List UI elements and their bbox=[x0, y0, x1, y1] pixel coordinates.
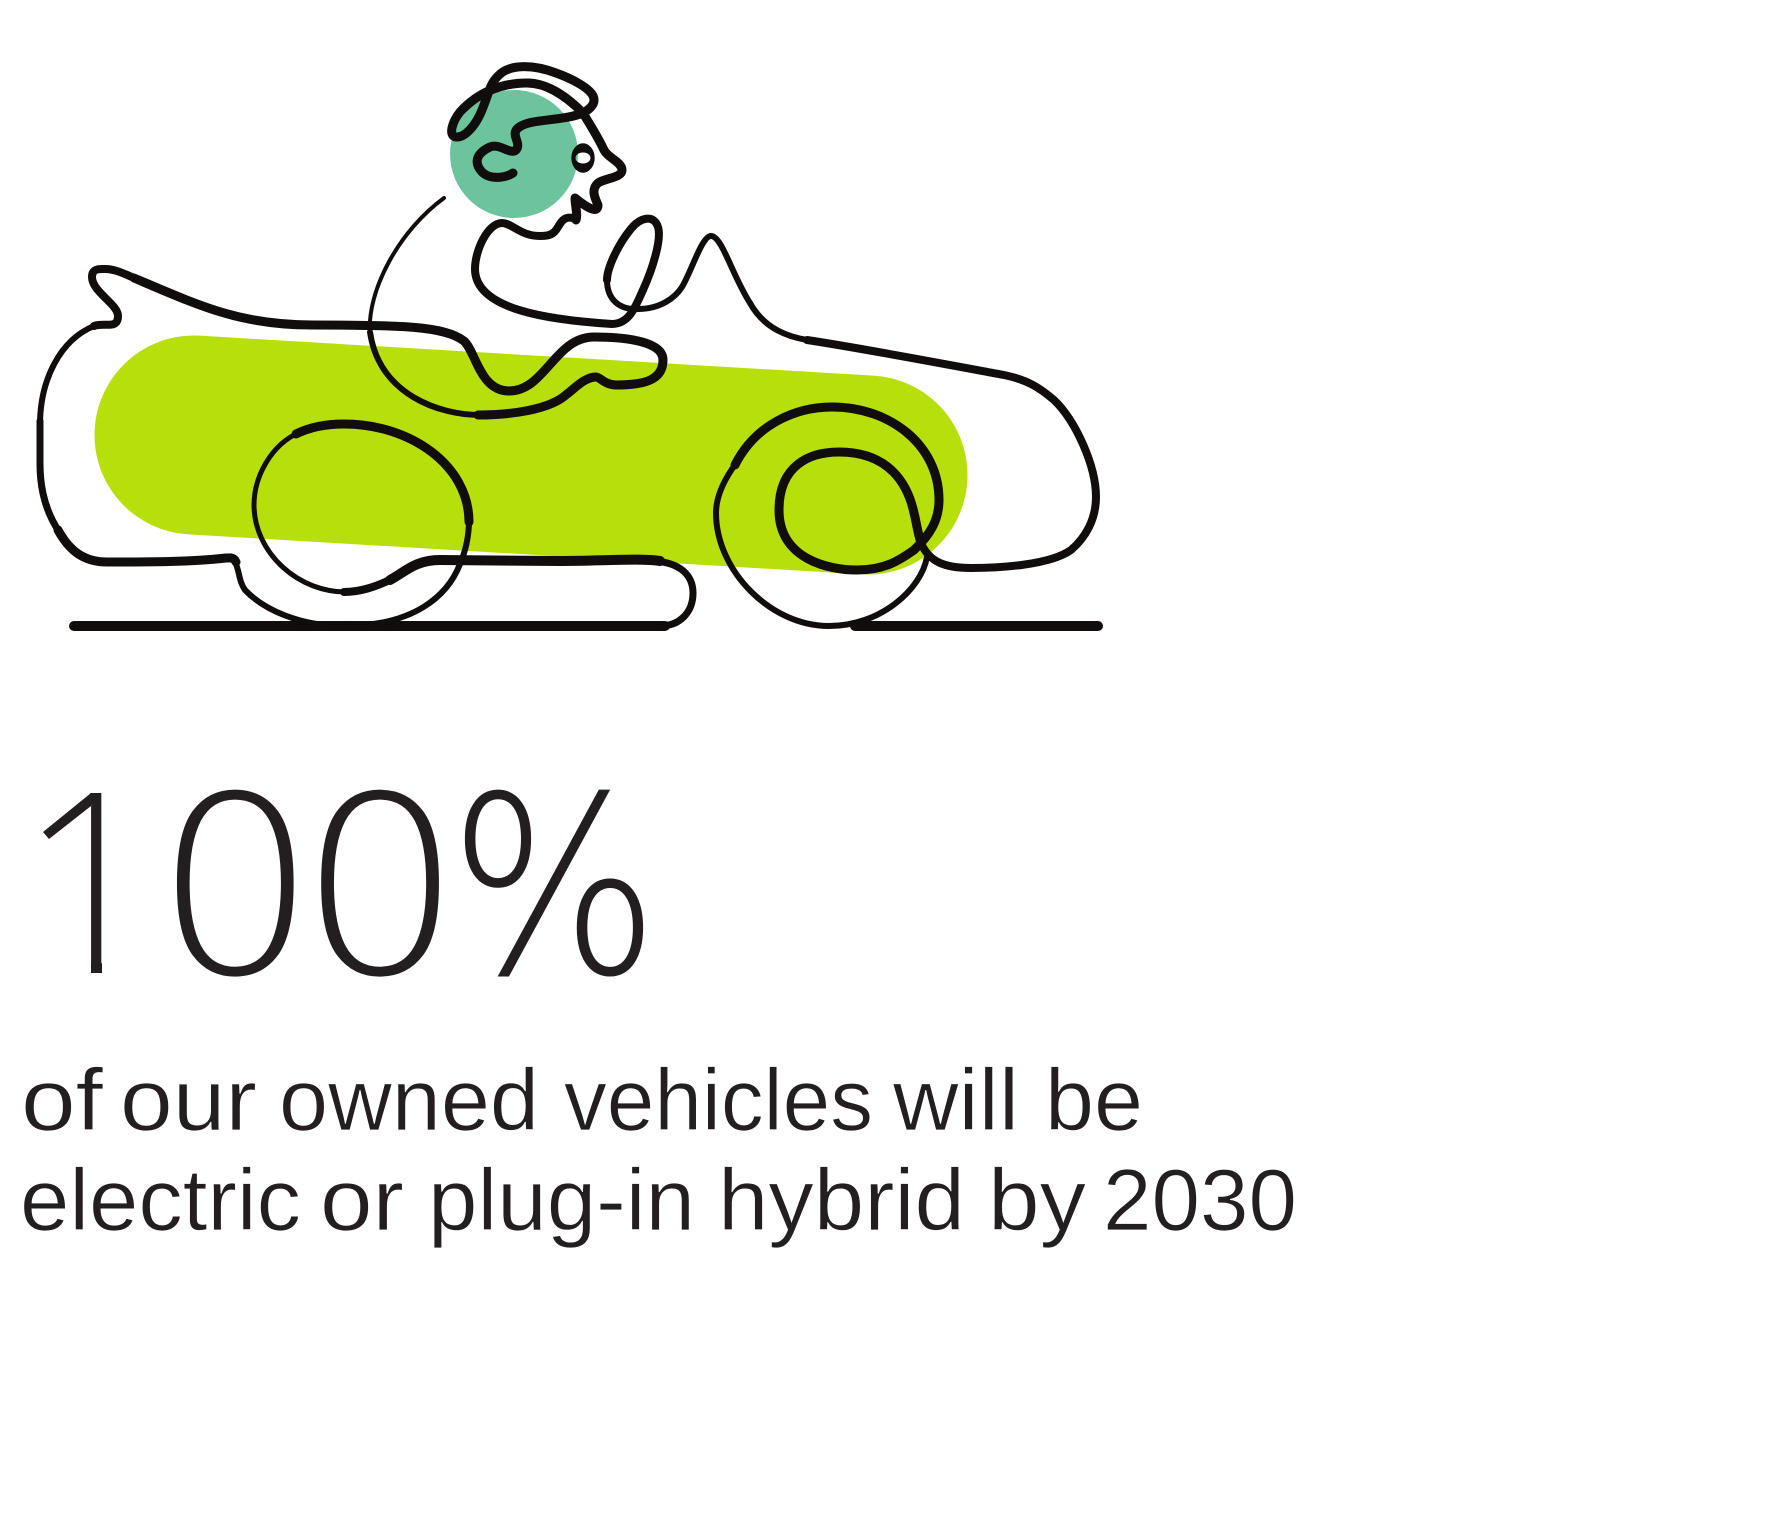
car line drawing bbox=[40, 198, 1098, 626]
line 1: will bbox=[892, 1052, 1019, 1149]
line 1: of bbox=[21, 1052, 104, 1149]
big statistic: 100%: 0 bbox=[154, 745, 317, 1032]
big statistic: 100%: 1 bbox=[26, 745, 160, 1032]
line 2: by bbox=[988, 1152, 1087, 1249]
driver head and cap line drawing bbox=[452, 67, 622, 220]
green pill car body bbox=[194, 435, 868, 475]
big statistic: 100%: 0 bbox=[298, 744, 463, 1032]
eye bbox=[571, 143, 595, 173]
line 2: plug-in bbox=[428, 1152, 695, 1249]
big statistic: 100% bbox=[26, 744, 660, 1032]
line 1: our bbox=[120, 1052, 257, 1149]
description text bbox=[20, 1052, 1297, 1249]
teal circle head bbox=[450, 90, 578, 218]
line 2: electric bbox=[20, 1152, 301, 1249]
illustration: driver in one-line electric car bbox=[40, 67, 1098, 626]
line 2 bbox=[20, 1152, 1297, 1249]
line 1: vehicles bbox=[564, 1052, 873, 1149]
line 2: or bbox=[320, 1152, 404, 1249]
line 2: hybrid bbox=[718, 1152, 965, 1249]
line 1: be bbox=[1045, 1052, 1143, 1149]
big statistic: 100%: % bbox=[448, 745, 660, 1032]
line 2: 2030 bbox=[1103, 1152, 1297, 1249]
line 1 bbox=[21, 1052, 1143, 1149]
line 1: owned bbox=[279, 1052, 539, 1149]
